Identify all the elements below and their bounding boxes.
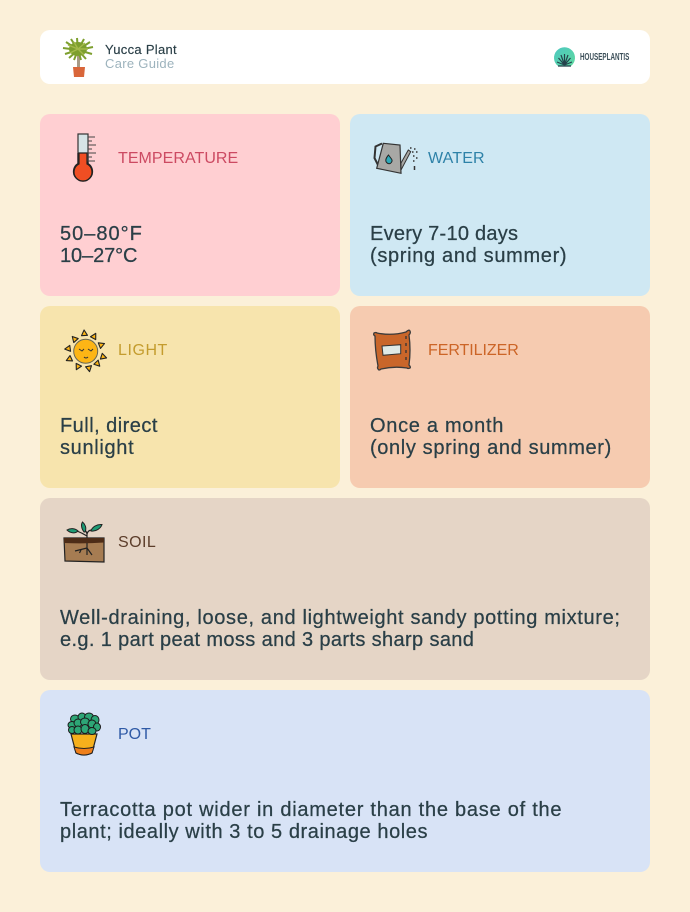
- text: soil mixture: e.g. 1 part peat moss and 3 parts sharp sand: [60, 629, 474, 651]
- text: light requirement: sunlight: [60, 437, 134, 459]
- label: water: WATER: [428, 150, 485, 167]
- panel: water: [350, 114, 650, 296]
- icon: logo mark: [554, 47, 575, 67]
- panel: temperature: [40, 114, 340, 296]
- label: light: LIGHT: [118, 342, 168, 359]
- label: temperature: TEMPERATURE: [118, 150, 238, 167]
- panel: pot: [40, 690, 650, 872]
- text: watering frequency: [370, 223, 567, 267]
- text: fertilizing frequency: Once a month: [370, 415, 504, 437]
- text: soil mixture: [60, 607, 621, 651]
- text: watering frequency: (spring and summer): [370, 245, 567, 267]
- icon: thermometer: [72, 133, 96, 182]
- text: soil mixture: Well-draining, loose, and lightweight sandy potting mixture;: [60, 607, 621, 629]
- label: pot: POT: [118, 726, 151, 743]
- text: light requirement: [60, 415, 158, 459]
- label: soil: SOIL: [118, 534, 156, 551]
- text: temperature range: [60, 223, 143, 267]
- title: plant name: Yucca Plant: [105, 42, 177, 57]
- panel: fertilizer: [350, 306, 650, 488]
- icon: soil with sprout: [63, 521, 105, 563]
- text: pot guidance: plant; ideally with 3 to 5 drainage holes: [60, 821, 428, 843]
- icon: sun: [64, 329, 108, 372]
- text: pot guidance: Terracotta pot wider in diameter than the base of the: [60, 799, 562, 821]
- icon: fertilizer bag: [373, 330, 411, 371]
- text: fertilizing frequency: [370, 415, 612, 459]
- logo wordmark: HOUSEPLANTIS: [580, 52, 629, 63]
- text: fertilizing frequency: (only spring and summer): [370, 437, 612, 459]
- text: pot guidance: [60, 799, 562, 843]
- text: temperature range: 50–80°F: [60, 223, 143, 245]
- icon: watering can: [374, 142, 418, 174]
- text: watering frequency: Every 7-10 days: [370, 223, 518, 245]
- text: temperature range: 10–27°C: [60, 245, 137, 267]
- header bar: [40, 30, 650, 84]
- panel: soil: [40, 498, 650, 680]
- subtitle: Care Guide: [105, 56, 174, 71]
- logo: Houseplantis: [554, 47, 630, 67]
- icon: potted plant: [68, 712, 101, 756]
- panel: light: [40, 306, 340, 488]
- text: light requirement: Full, direct: [60, 415, 158, 437]
- icon: yucca plant: [62, 38, 94, 77]
- label: fertilizer: FERTILIZER: [428, 342, 519, 359]
